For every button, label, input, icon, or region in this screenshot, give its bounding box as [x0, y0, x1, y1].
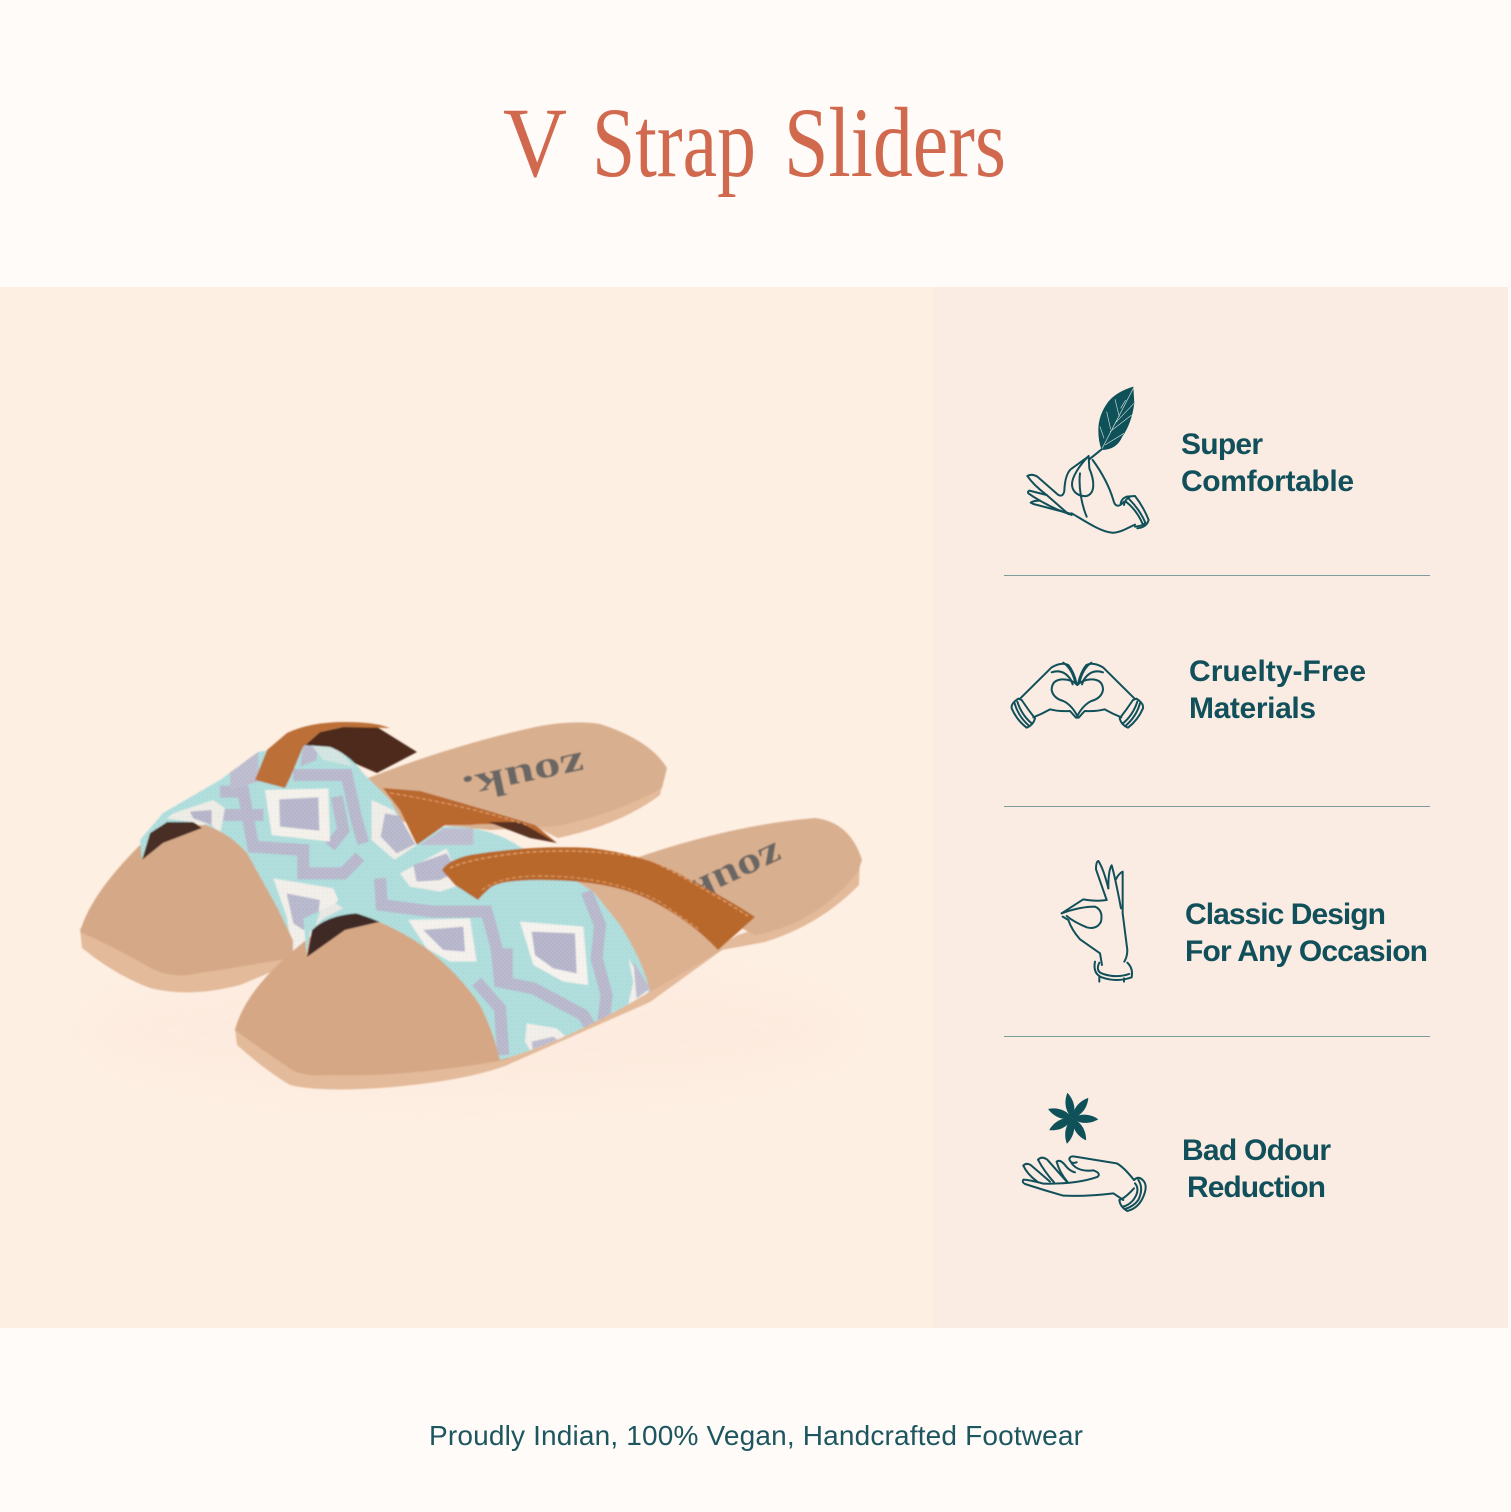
- footbed toe: [80, 825, 310, 976]
- title: [503, 87, 1006, 198]
- back cross strap leather: [383, 788, 557, 845]
- text: cruelty-free materials: Cruelty-Free: [1189, 655, 1366, 688]
- heel sole: [235, 858, 860, 1089]
- text: cruelty-free materials: Materials: [1189, 692, 1316, 725]
- heel strap leather: [255, 722, 390, 788]
- sliders illustration: [80, 722, 862, 1089]
- woven strap: [139, 744, 416, 952]
- logo: zouk: zouk.: [459, 743, 589, 810]
- front slider: [235, 815, 862, 1089]
- text: cruelty-free materials: [1189, 655, 1366, 725]
- pattern: [380, 878, 593, 1032]
- pattern: [293, 775, 363, 843]
- title: Sliders: [784, 87, 1006, 198]
- icon: hand holding leaf: [1027, 387, 1149, 533]
- heel strap inner: [303, 727, 417, 773]
- opening shadow: [307, 913, 383, 957]
- footbed mid: [560, 870, 722, 1000]
- icon: heart hands: [1012, 663, 1143, 728]
- text: bad odour reduction: Reduction: [1187, 1171, 1326, 1204]
- text: super comfortable: Comfortable: [1181, 465, 1354, 498]
- text: classic design: For Any Occasion: [1185, 935, 1428, 968]
- logo: zouk: zouk.: [671, 834, 790, 919]
- text: classic design: Classic Design: [1185, 898, 1386, 931]
- heel sole: [480, 770, 665, 838]
- footbed heel: [630, 818, 862, 935]
- text: bad odour reduction: Bad Odour: [1182, 1134, 1331, 1167]
- back slider: [80, 722, 667, 992]
- front strap leather: [442, 847, 755, 950]
- text: super comfortable: Super: [1181, 428, 1263, 461]
- title: V: [503, 87, 567, 198]
- dividers: [1004, 576, 1430, 1036]
- icon: flower over open hand: [1023, 1092, 1146, 1211]
- footbed toe: [235, 915, 530, 1076]
- opening shadow: [142, 822, 202, 860]
- icon: okay hand: [1062, 861, 1132, 982]
- text: super comfortable: [1181, 428, 1354, 498]
- text: bad odour reduction: [1182, 1134, 1331, 1204]
- tagline: Proudly Indian, 100% Vegan, Handcrafted Footwear: [429, 1420, 1083, 1451]
- footbed heel: [350, 722, 667, 830]
- panel: features: [934, 287, 1508, 1328]
- soft ground shadow: [90, 965, 850, 1095]
- title: Strap: [592, 87, 756, 198]
- toe sole: [80, 928, 305, 992]
- panel: product photo: [0, 287, 934, 1328]
- woven strap: [303, 826, 650, 1060]
- text: classic design: [1185, 898, 1428, 968]
